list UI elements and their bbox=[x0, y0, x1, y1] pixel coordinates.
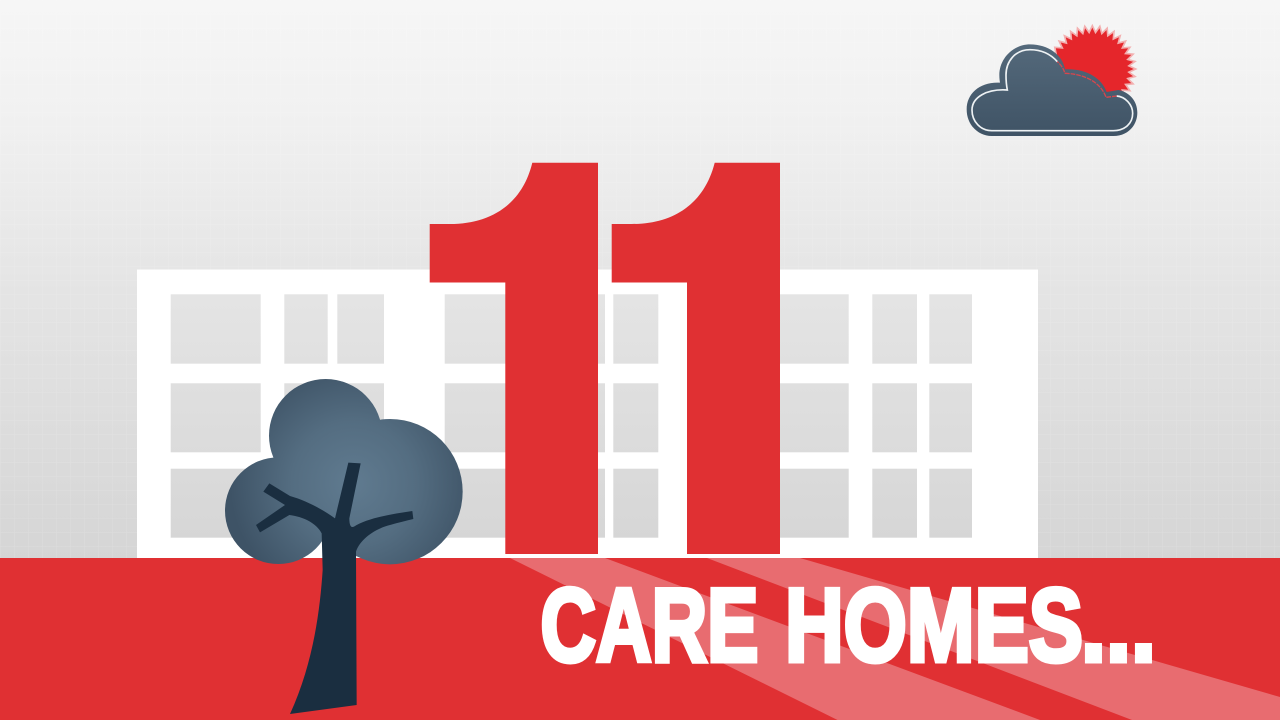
building with windows bbox=[137, 270, 1038, 558]
icon: tree bbox=[225, 379, 463, 714]
tree crown bbox=[225, 379, 463, 564]
cloud outline beside sun bbox=[1057, 62, 1117, 97]
caption: care homes: ... bbox=[1081, 568, 1156, 684]
caption: care homes: CARE bbox=[540, 568, 758, 684]
background gradient bbox=[0, 0, 1280, 560]
big number 11 bbox=[430, 163, 780, 554]
second digit 1 bbox=[612, 163, 780, 554]
sun bbox=[1055, 26, 1136, 110]
light beams on ground bbox=[510, 558, 1280, 720]
cloud inner outline bbox=[972, 50, 1133, 131]
first digit 1 bbox=[430, 163, 598, 554]
caption: care homes: HOMES bbox=[785, 568, 1083, 684]
tree trunk and branches bbox=[256, 463, 413, 714]
cloud body bbox=[967, 44, 1137, 136]
caption: care homes bbox=[540, 568, 1156, 684]
red ground band bbox=[0, 558, 1280, 720]
icon: cloud with sun bbox=[967, 26, 1137, 136]
